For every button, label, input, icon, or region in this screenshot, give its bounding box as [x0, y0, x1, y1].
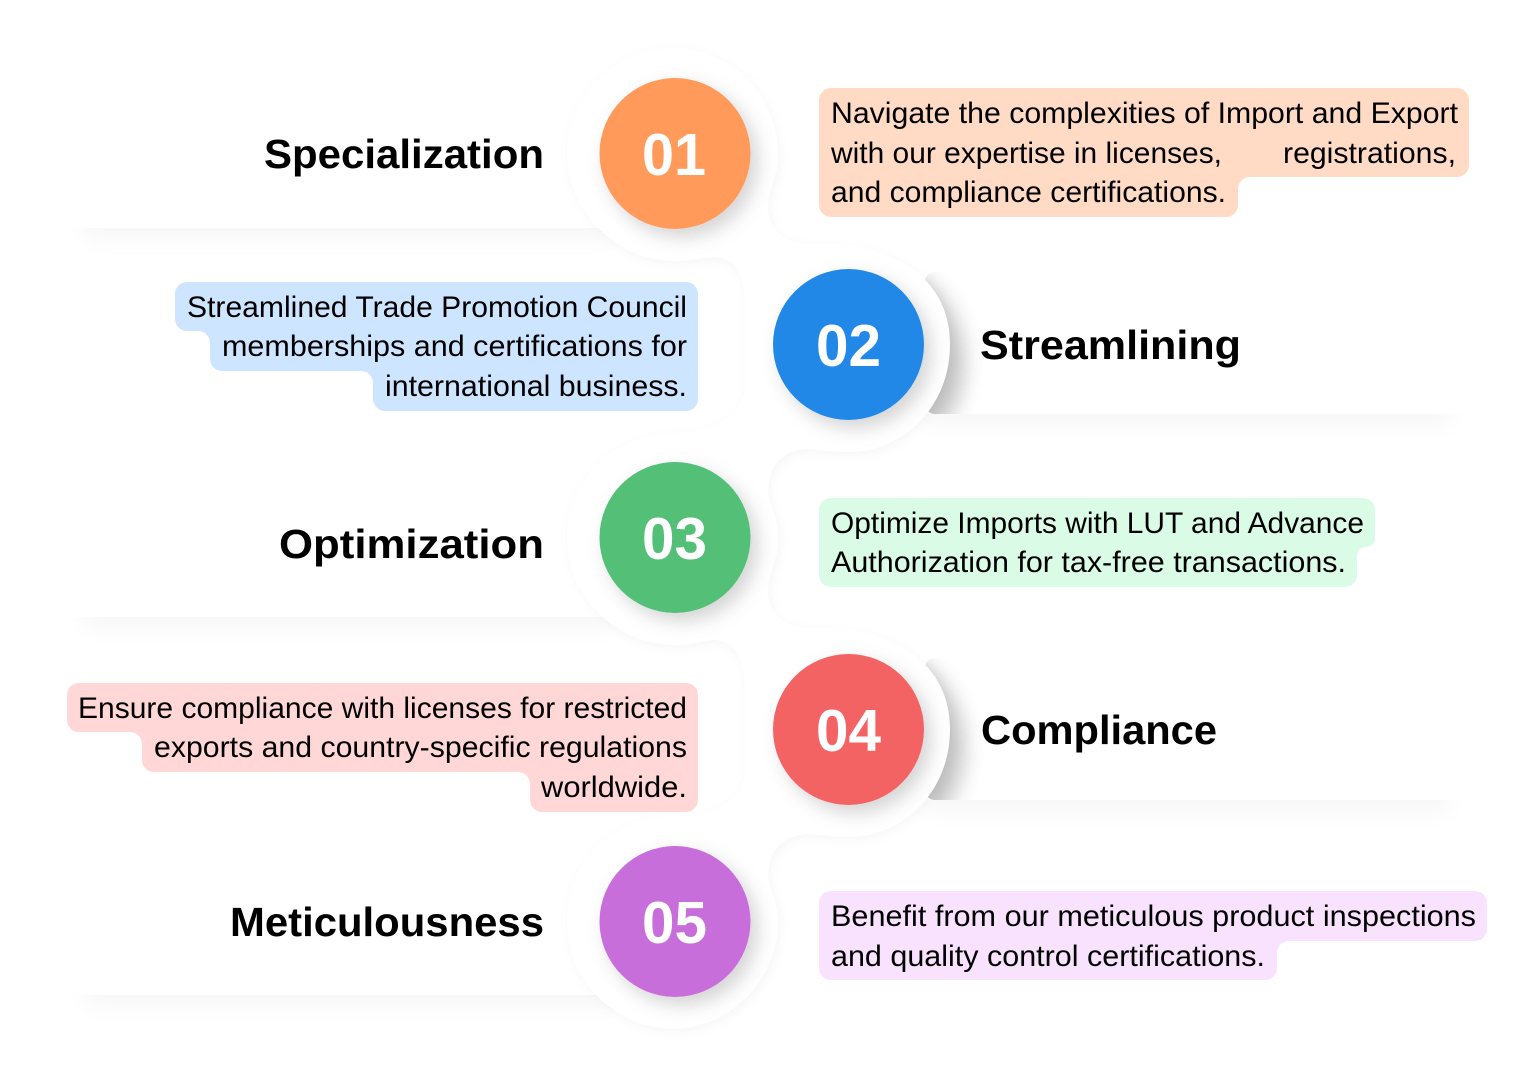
- description 02: international business.: [385, 370, 687, 403]
- title: Meticulousness: Meticulousness: [230, 899, 544, 945]
- description 02: [175, 282, 698, 411]
- title: Optimization: Optimization: [279, 521, 544, 567]
- step 01: Specialization: [264, 78, 1469, 229]
- description 02: memberships and certifications for: [222, 330, 687, 363]
- step 05: Meticulousness: [230, 846, 1487, 997]
- description 01: [819, 88, 1469, 217]
- description 05: [819, 891, 1487, 980]
- description 04: exports and country-specific regulations: [154, 731, 687, 764]
- description 03: Authorization for tax-free transactions.: [831, 546, 1346, 579]
- number badge 04: 04: [816, 698, 881, 764]
- number badge 04: [773, 654, 924, 805]
- description 03: [819, 498, 1375, 587]
- number badge 03: [600, 462, 750, 613]
- number badge 03: 03: [642, 506, 707, 572]
- description 03: Optimize Imports with LUT and Advance: [831, 507, 1364, 540]
- title: Specialization: Specialization: [264, 131, 544, 177]
- description 05: Benefit from our meticulous product inspections: [831, 900, 1476, 933]
- number badge 05: 05: [642, 890, 707, 956]
- title: Compliance: Compliance: [981, 707, 1217, 753]
- description 01: with our expertise in licenses,: [830, 137, 1222, 170]
- number badge 01: [600, 78, 750, 229]
- description 05: and quality control certifications.: [831, 940, 1265, 973]
- description 04: worldwide.: [540, 771, 687, 804]
- shadow cast by the halos on the right bands: [925, 273, 974, 800]
- number badge 05: [600, 846, 750, 997]
- description 01: Navigate the complexities of Import and Export: [831, 97, 1459, 130]
- serpentine white ribbon: [567, 48, 950, 1029]
- description 01: and compliance certifications.: [831, 176, 1226, 209]
- number badge 02: 02: [816, 313, 881, 379]
- description 01: registrations,: [1283, 137, 1456, 170]
- title: Streamlining: Streamlining: [980, 322, 1241, 368]
- number badge 02: [773, 269, 924, 420]
- description 04: [67, 683, 698, 812]
- step 04: Compliance: [67, 654, 1217, 812]
- step 02: Streamlining: [175, 269, 1241, 420]
- number badge 01: 01: [642, 122, 706, 188]
- step 03: Optimization: [279, 462, 1375, 613]
- description 04: Ensure compliance with licenses for restricted: [78, 692, 687, 725]
- description 02: Streamlined Trade Promotion Council: [187, 291, 687, 324]
